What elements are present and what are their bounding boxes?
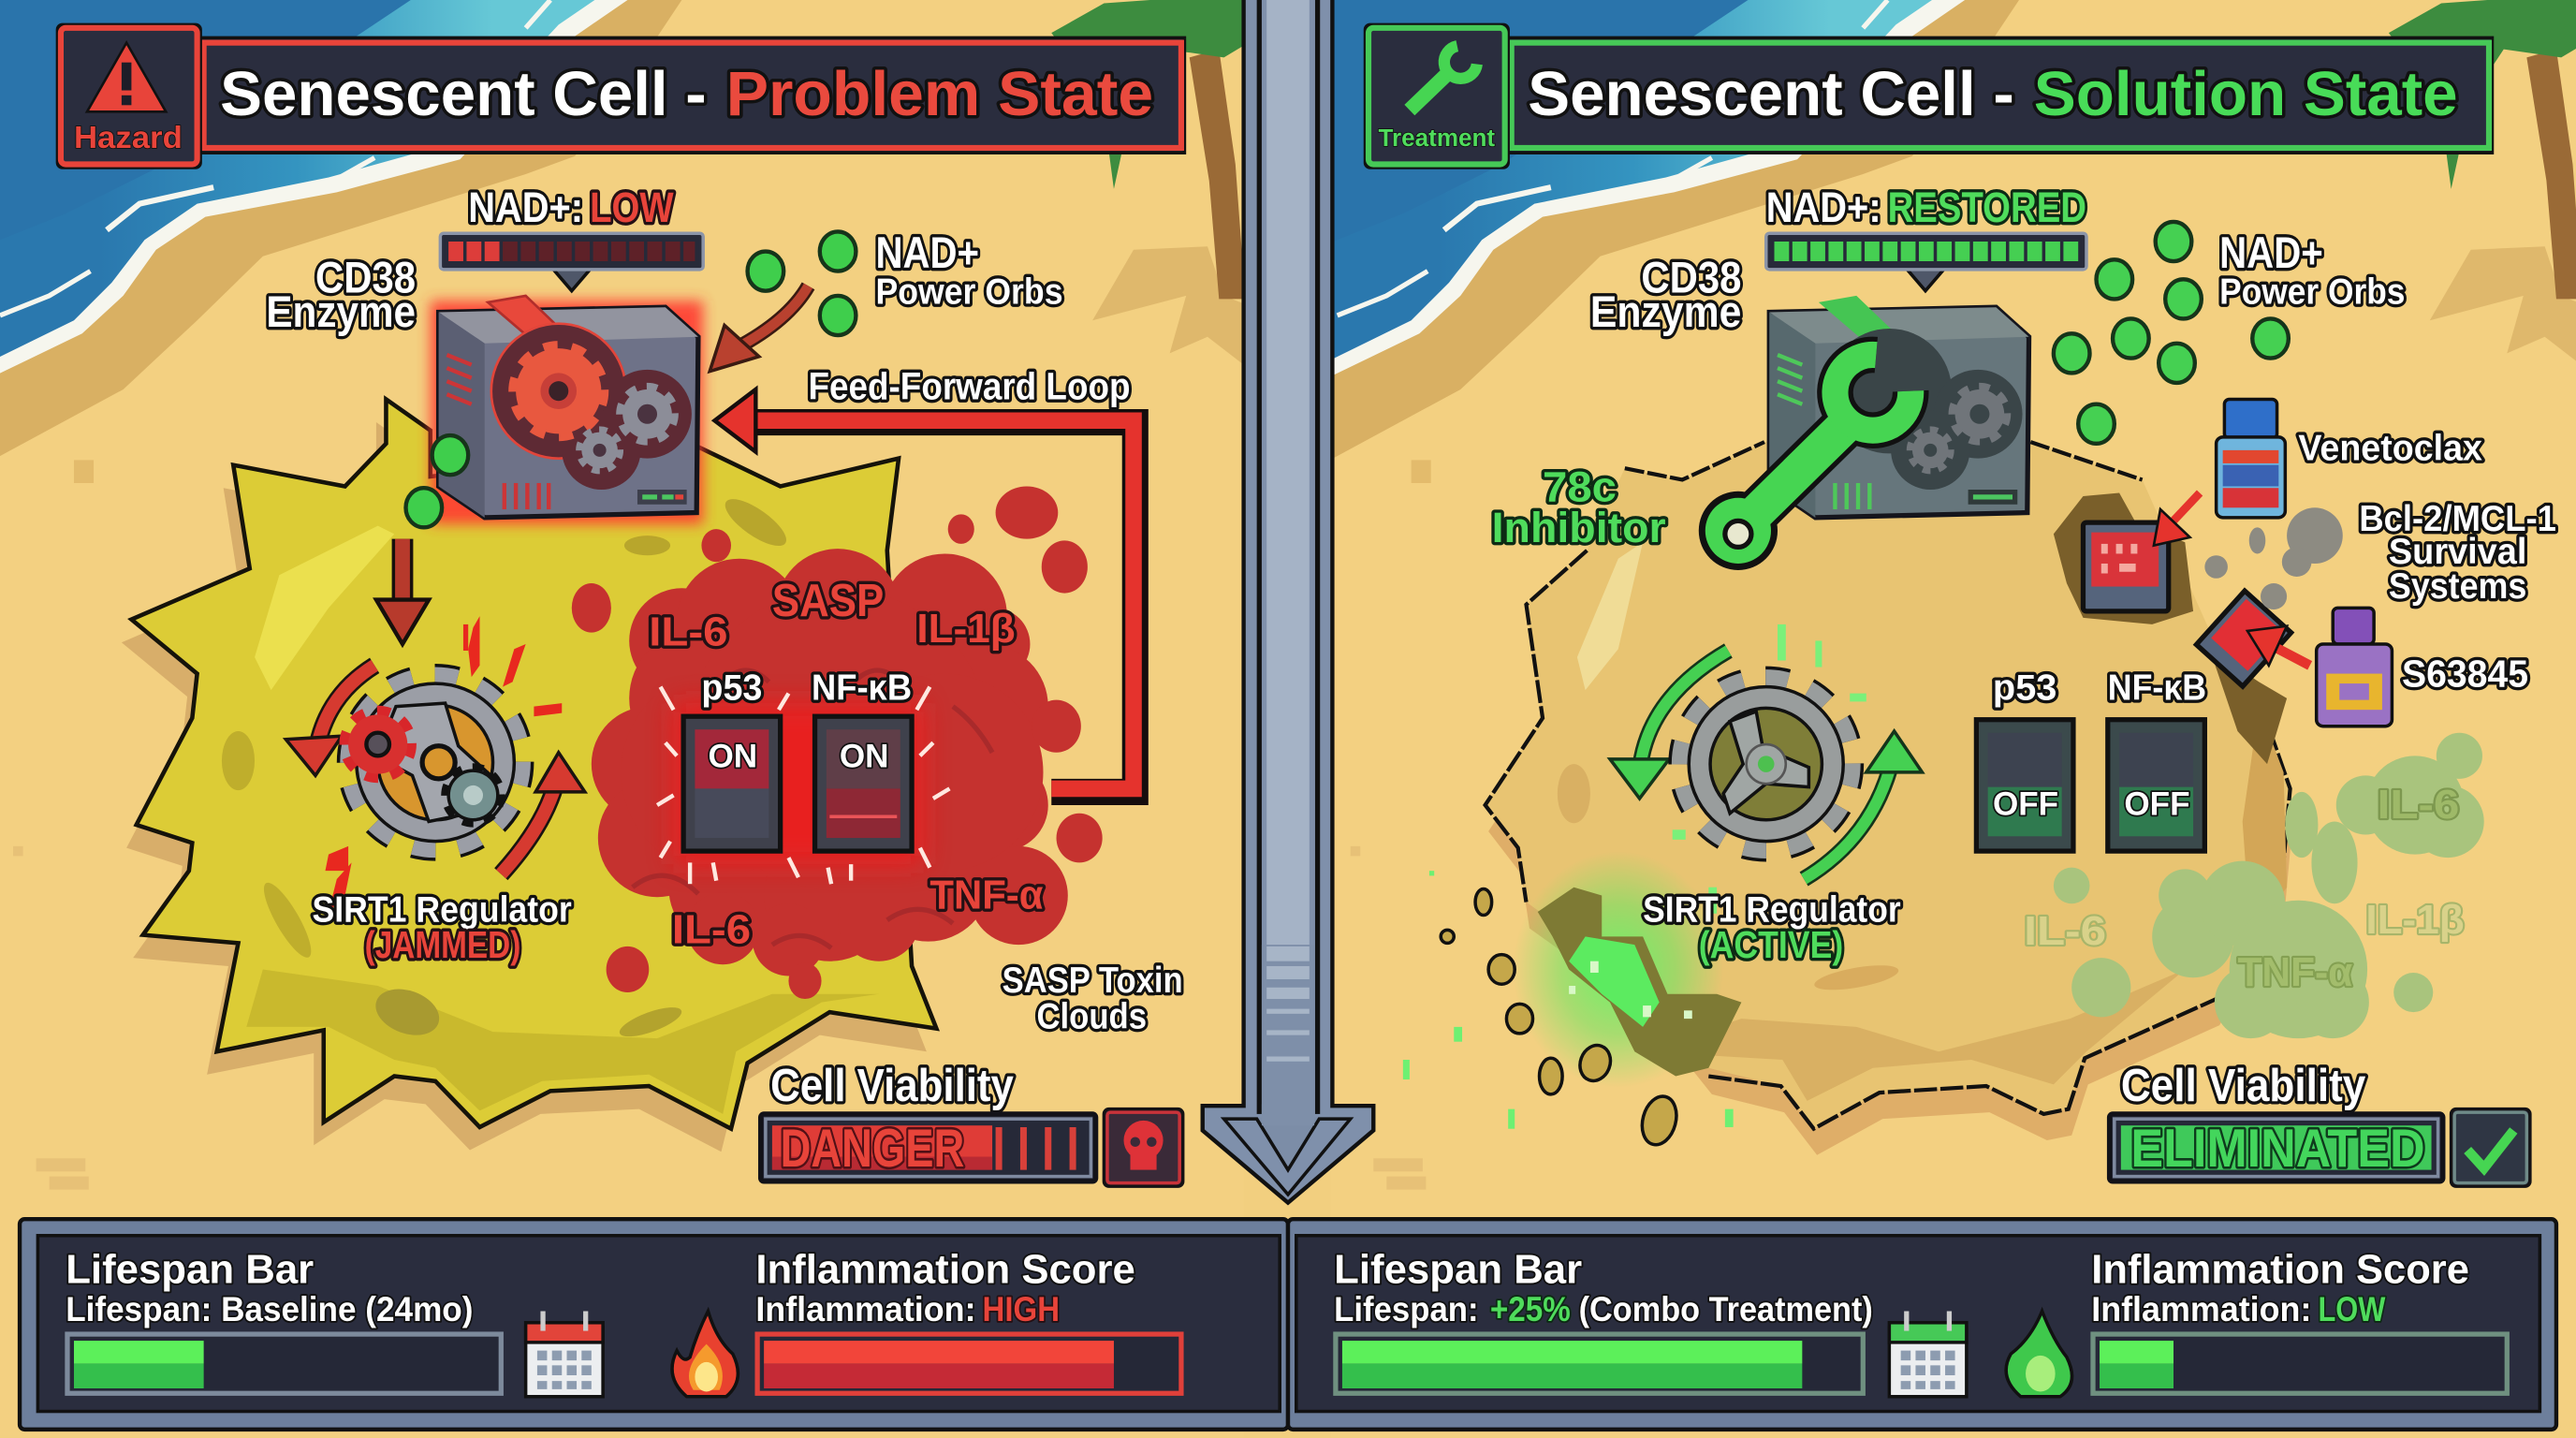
beach background right [1335,0,2576,1189]
icon: flame red [672,1312,738,1397]
label: venetoclax: Venetoclax [2298,428,2482,468]
icon: check mark [2452,1109,2530,1186]
icon: treatment wrench [1410,46,1477,110]
label: SIRT1 active: (ACTIVE) [1699,923,1843,966]
label: Bcl-2/MCL-1 survival systems: Bcl-2/MCL-1 [2359,499,2556,539]
label: NAD low with gauge: NAD+: [468,183,583,231]
icon: CD38 machine inhibited [1769,296,2029,518]
label: SASP cytokines: IL-1β [916,606,1016,652]
ghost cytokine labels: IL-6 [2378,782,2459,828]
stat: inflammation high: Inflammation: [755,1290,976,1328]
Bcl-2 and MCL-1 survival systems destroyed [2054,493,2343,764]
stat: lifespan baseline: Lifespan: Baseline (24mo) [66,1290,473,1328]
label: 78c inhibitor: 78c [1543,462,1617,510]
label: switches: p53 [701,668,762,709]
p53 and NF-kB switches on: ON [708,739,757,775]
feed-forward loop arrow [714,389,1135,792]
stat: inflammation low: Inflammation: [2091,1290,2311,1328]
label: Bcl-2/MCL-1 survival systems: Systems [2389,566,2526,607]
arrow: venetoclax attack [2154,493,2200,546]
label: NAD restored with gauge [1766,183,2086,291]
stat: lifespan treatment: Lifespan Bar [1334,1247,1582,1293]
icon: calendar red [526,1312,603,1397]
stat: lifespan treatment: (Combo Treatment) [1579,1290,1873,1328]
label: NAD+ power orbs right [2219,228,2405,313]
beach background left [0,0,1241,1189]
p53 and NF-kB switches on: ON [840,739,889,775]
label: CD38 enzyme: Enzyme [266,287,416,337]
label: SIRT1 jammed [312,890,572,966]
label: NAD+ power orbs right: NAD+ [2219,228,2323,278]
stat: lifespan treatment: +25% [1490,1290,1571,1328]
stat: inflammation high: HIGH [983,1290,1060,1328]
label: S63845: S63845 [2402,653,2528,696]
p53 and NF-kB switches off [1976,720,2204,851]
header: problem state: Hazard [74,121,183,155]
label: NAD+ power orbs [875,228,1063,313]
icon: S63845 bottle [2317,608,2392,726]
stat: inflammation low: Inflammation Score [2091,1247,2469,1293]
p53 and NF-kB switches off: OFF [1993,785,2058,822]
stat: lifespan baseline [66,1247,501,1393]
cell viability danger: DANGER [781,1119,964,1179]
label: NAD+ power orbs: Power Orbs [875,272,1063,313]
panel: problem state [57,24,1184,1186]
senescent cell body yellow [122,399,936,1152]
stat: inflammation low: LOW [2318,1290,2386,1328]
p53 and NF-kB switches on [657,687,949,884]
label: CD38 enzyme right [1590,253,1741,337]
label: SASP cytokines: IL-6 [672,906,751,952]
ghost cytokine labels: TNF-α [2237,949,2352,995]
ghost cytokine clouds [2054,733,2484,1038]
icon: 78c wrench inhibitor [1699,355,1910,570]
label: switches off: NF-κB [2108,668,2206,709]
label: switches: NF-κB [812,668,912,709]
label: switches [701,668,912,709]
header: solution state: Solution State [2034,60,2458,129]
gear icon: SIRT1 active [1610,624,1922,914]
icon: CD38 machine [431,296,703,524]
icon: calendar green [1889,1312,1967,1397]
stat: inflammation high [755,1247,1181,1393]
label: NAD restored with gauge: RESTORED [1888,183,2086,231]
header: solution state [1365,24,2492,168]
header: solution state: Treatment [1379,124,1495,152]
jam arrow left [315,666,374,759]
senescent cell remnant [1486,442,2293,1155]
ghost cytokine labels: IL-1β [2365,897,2465,943]
arrow: S63845 attack [2247,626,2310,666]
explosion breach [1403,851,1741,1149]
cell viability danger [761,1061,1096,1181]
ghost cytokine labels [2024,782,2465,995]
stat: lifespan baseline: Lifespan Bar [66,1247,314,1293]
NAD+ orbs [406,231,856,527]
stat: lifespan treatment [1334,1247,1873,1393]
cell viability eliminated: Cell Viability [2121,1061,2366,1111]
p53 and NF-kB switches off: OFF [2124,785,2190,822]
header: solution state: Senescent Cell - [1528,60,2014,129]
cell viability danger: Cell Viability [770,1061,1014,1111]
label: switches off: p53 [1993,668,2056,709]
NAD+ orbs restored [2054,222,2289,444]
arrow: NAD consumed [710,286,809,372]
label: 78c inhibitor [1492,462,1666,551]
label: SASP cytokines: SASP [772,576,884,626]
label: 78c inhibitor: Inhibitor [1492,504,1666,551]
label: SASP cytokines: IL-6 [649,609,728,655]
label: feed-forward loop: Feed-Forward Loop [809,364,1131,407]
cell viability eliminated: ELIMINATED [2130,1119,2425,1179]
label: SASP toxin clouds: SASP Toxin [1003,961,1183,1001]
label: NAD low with gauge [440,183,703,291]
label: SASP cytokines [649,576,1044,952]
label: switches off [1993,668,2206,709]
label: SIRT1 active: SIRT1 Regulator [1643,890,1901,931]
label: Bcl-2/MCL-1 survival systems: Survival [2389,532,2526,572]
arrow: NAD into SIRT1 [376,539,429,644]
label: CD38 enzyme: CD38 [315,253,416,302]
icon: flame green [2006,1312,2072,1397]
header: problem state [57,24,1184,168]
stat: inflammation high: Inflammation Score [755,1247,1135,1293]
label: SIRT1 jammed: SIRT1 Regulator [312,890,572,931]
SASP toxin cloud [572,486,1103,999]
icon: venetoclax bottle [2217,399,2285,518]
gear icon: SIRT1 jammed [285,616,585,912]
label: Bcl-2/MCL-1 survival systems [2359,499,2556,607]
icon: skull [1104,1109,1183,1186]
label: NAD restored with gauge: NAD+: [1766,183,1881,231]
label: NAD+ power orbs: NAD+ [875,228,979,278]
stat: inflammation low [2091,1247,2507,1393]
stat: lifespan treatment: Lifespan: [1334,1290,1479,1328]
label: CD38 enzyme right: CD38 [1641,253,1741,302]
bottom stats frame [20,1219,2556,1430]
header: problem state: Problem State [726,60,1153,129]
label: SASP cytokines: TNF-α [929,873,1044,918]
label: SIRT1 jammed: (JAMMED) [365,923,520,966]
header: problem state: Senescent Cell - [220,60,707,129]
label: CD38 enzyme right: Enzyme [1590,287,1741,337]
label: SASP toxin clouds: Clouds [1036,997,1147,1037]
label: NAD low with gauge: LOW [590,183,674,231]
cell viability eliminated [2110,1061,2443,1181]
label: NAD+ power orbs right: Power Orbs [2219,272,2405,313]
icon: hazard triangle [87,43,166,111]
label: SASP toxin clouds [1003,961,1183,1037]
panel: solution state [1365,24,2556,1186]
central divider arrow [1203,0,1373,1203]
ghost cytokine labels: IL-6 [2024,908,2106,954]
label: CD38 enzyme [266,253,416,337]
label: SIRT1 active [1643,890,1901,966]
